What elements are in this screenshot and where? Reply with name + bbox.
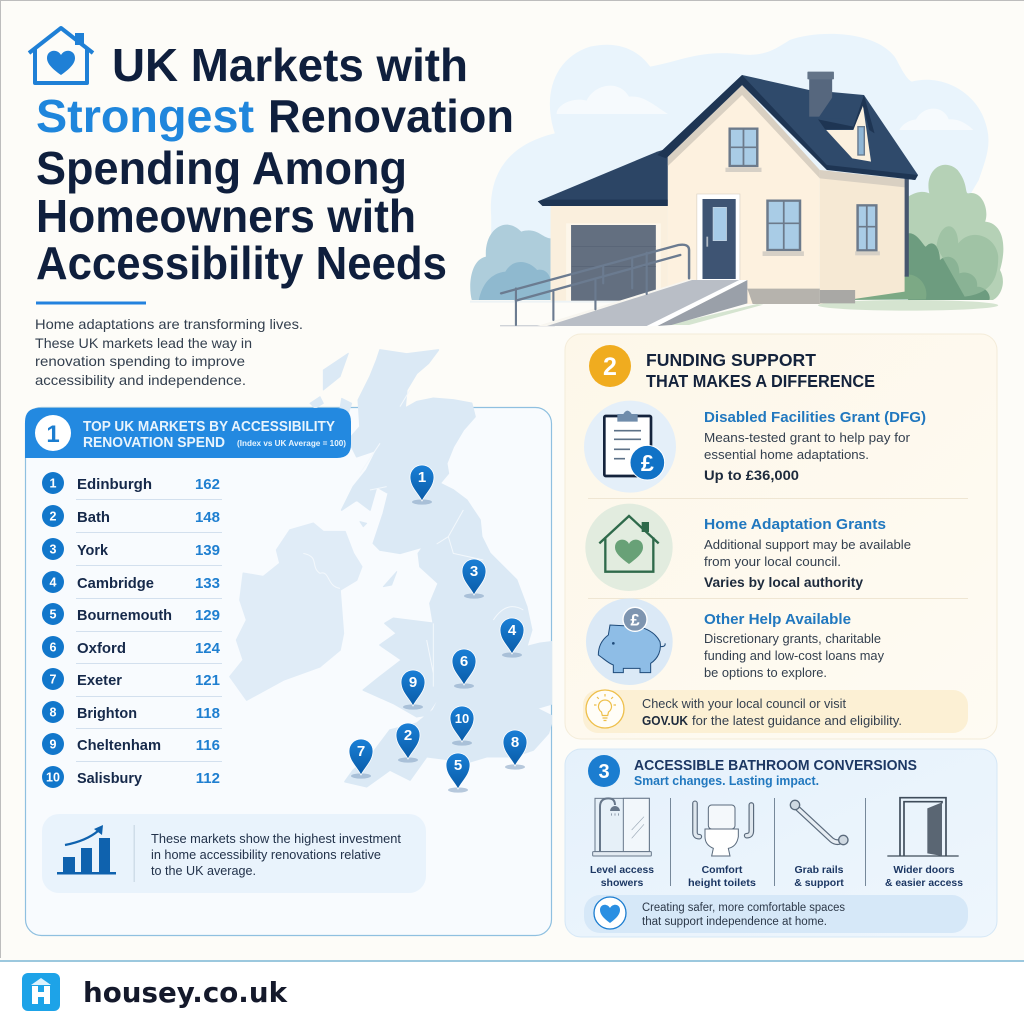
funding item: DFG: Means-tested grant to help pay for <box>704 431 910 445</box>
dormer <box>818 95 864 118</box>
ranking list: Brighton <box>77 705 137 722</box>
ranking list: Bath <box>77 509 110 526</box>
map pins: 10 <box>455 711 469 726</box>
ranking list: 116 <box>196 737 220 754</box>
ranking list: Exeter <box>77 672 122 689</box>
title: Strongest <box>36 90 254 142</box>
funding item: other help: be options to explore. <box>704 666 827 680</box>
label: level access showers: Level access <box>590 864 654 876</box>
ranking list: 121 <box>195 672 220 689</box>
bushes <box>470 165 1003 300</box>
funding item: DFG: Disabled Facilities Grant (DFG) <box>704 409 926 426</box>
map pins: 4 <box>508 622 517 639</box>
callout: safer spaces: Creating safer, more comfortable spaces <box>642 902 845 914</box>
title: Accessibility Needs <box>36 237 447 289</box>
funding item: other help: Discretionary grants, charitable <box>704 632 881 646</box>
footer: housey.co.uk <box>83 976 288 1009</box>
ranking list: 4 <box>50 576 57 590</box>
heading: 2 <box>603 353 617 381</box>
ranking list: 139 <box>195 542 220 559</box>
garage <box>551 205 668 301</box>
funding item: DFG: Up to £36,000 <box>704 467 799 483</box>
sky cloud backdrop <box>491 34 988 300</box>
main walls <box>668 85 820 304</box>
title: Homeowners with <box>36 190 416 242</box>
icon: level access shower <box>593 798 651 856</box>
icon: piggy bank: £ <box>630 611 640 630</box>
ranking list: 8 <box>50 706 57 720</box>
illustration: house with access ramp <box>470 34 1003 326</box>
icon: comfort height toilet <box>695 803 751 856</box>
ranking list: Cambridge <box>77 575 154 592</box>
funding item: home adaptation grants: Varies by local authority <box>704 574 863 590</box>
map of UK and Ireland <box>230 350 553 787</box>
ranking list: 133 <box>195 575 220 592</box>
icon: piggy bank <box>586 598 673 685</box>
intro text: renovation spending to improve <box>35 353 245 369</box>
panel: accessible bathroom conversions <box>565 749 997 937</box>
ranking list: 124 <box>195 640 221 657</box>
logo <box>22 973 60 1011</box>
footer <box>0 960 1024 1024</box>
map pins: 9 <box>409 674 417 691</box>
ranking list: Oxford <box>77 640 126 657</box>
windows <box>730 129 876 250</box>
ranking list: Salisbury <box>77 770 143 787</box>
title: Renovation <box>268 90 514 142</box>
funding item: home adaptation grants: Additional support may be available <box>704 538 911 552</box>
callout: safer spaces <box>584 895 968 933</box>
heading <box>588 755 917 788</box>
icon: wider door <box>887 798 959 856</box>
ranking list: Edinburgh <box>77 476 152 493</box>
callout: highest investment <box>42 814 426 893</box>
header band <box>25 408 351 458</box>
ranking list: York <box>77 542 109 559</box>
ranking list: 1 <box>50 476 57 490</box>
callout: highest investment: in home accessibility renovations relative <box>151 848 381 862</box>
title: UK Markets with <box>112 39 468 91</box>
header band: 1 <box>46 421 60 448</box>
ranking list: 6 <box>50 640 57 654</box>
icon: green house heart <box>585 504 673 591</box>
ranking list: 10 <box>46 770 60 784</box>
callout: safer spaces: that support independence at home. <box>642 916 827 928</box>
header band: (Index vs UK Average = 100) <box>237 438 346 448</box>
icon: grab rail <box>790 800 848 845</box>
icon: clipboard with pound coin <box>584 401 676 493</box>
main roof <box>657 75 918 180</box>
ranking list: 2 <box>50 510 57 524</box>
map pins: 7 <box>357 743 365 760</box>
header band: TOP UK MARKETS BY ACCESSIBILITY <box>83 419 335 435</box>
title house-heart icon <box>29 28 93 83</box>
ground <box>470 301 640 303</box>
front door <box>697 194 740 281</box>
ranking list: Cheltenham <box>77 737 161 754</box>
map pins: 8 <box>511 734 519 751</box>
label: comfort height toilets: height toilets <box>688 877 756 889</box>
ranking list: 118 <box>196 705 220 722</box>
map pins: 6 <box>460 653 468 670</box>
title <box>36 39 514 289</box>
label: level access showers: showers <box>601 877 643 889</box>
ranking list <box>42 472 222 788</box>
map pins: 3 <box>470 563 478 580</box>
ranking list: 5 <box>50 608 57 622</box>
map pins <box>349 465 527 793</box>
label: wider doors: & easier access <box>885 877 963 889</box>
chimney <box>809 78 832 117</box>
label: grab rails: & support <box>794 877 844 889</box>
callout: highest investment: These markets show the highest investment <box>151 832 402 846</box>
ranking list: 129 <box>195 607 220 624</box>
funding item: DFG <box>704 409 926 483</box>
heading: 3 <box>598 761 610 783</box>
ranking list: 148 <box>195 509 220 526</box>
funding item: DFG: essential home adaptations. <box>704 448 869 462</box>
label: comfort height toilets <box>688 864 756 889</box>
ranking list: 7 <box>50 672 57 686</box>
panel: funding support <box>565 334 997 739</box>
hand rails <box>501 245 689 325</box>
label: level access showers <box>590 864 654 889</box>
panel: top UK markets <box>25 350 553 936</box>
label: grab rails: Grab rails <box>794 864 844 876</box>
ranking list: 112 <box>196 770 220 787</box>
ranking list: 162 <box>195 476 220 493</box>
tip callout: for the latest guidance and eligibility. <box>692 714 902 728</box>
funding item: home adaptation grants <box>704 516 911 590</box>
ranking list: 9 <box>50 738 57 752</box>
intro text: These UK markets lead the way in <box>35 335 252 351</box>
tip callout <box>583 690 968 733</box>
heading <box>589 345 875 391</box>
funding item: home adaptation grants: Home Adaptation Grants <box>704 516 886 533</box>
intro text: accessibility and independence. <box>35 372 246 388</box>
heading: FUNDING SUPPORT <box>646 350 816 370</box>
ranking list: 3 <box>50 542 57 556</box>
intro text <box>35 316 303 388</box>
label: wider doors: Wider doors <box>893 864 955 876</box>
heading: THAT MAKES A DIFFERENCE <box>646 371 875 391</box>
icon: rising bar chart <box>57 825 116 874</box>
callout: highest investment: to the UK average. <box>151 864 256 878</box>
ranking list: Bournemouth <box>77 607 172 624</box>
funding item: other help: funding and low-cost loans may <box>704 649 885 663</box>
intro text: Home adaptations are transforming lives. <box>35 316 303 332</box>
header band: RENOVATION SPEND <box>83 435 225 451</box>
title: Spending Among <box>36 142 407 194</box>
tip callout: GOV.UK <box>642 714 688 728</box>
map pins: 1 <box>418 469 426 486</box>
funding item: other help: Other Help Available <box>704 611 851 628</box>
funding item: other help <box>704 611 885 680</box>
funding item: home adaptation grants: from your local council. <box>704 555 841 569</box>
map pins: 5 <box>454 757 462 774</box>
icon: light bulb <box>586 690 624 728</box>
tip callout: Check with your local council or visit <box>642 697 847 711</box>
ramp <box>500 325 555 326</box>
label: comfort height toilets: Comfort <box>702 864 743 876</box>
heading: Smart changes. Lasting impact. <box>634 773 819 788</box>
icon: clipboard with pound coin: £ <box>641 450 654 476</box>
heading: ACCESSIBLE BATHROOM CONVERSIONS <box>634 758 917 774</box>
map pins: 2 <box>404 727 412 744</box>
label: grab rails <box>794 864 844 889</box>
label: wider doors <box>885 864 963 889</box>
